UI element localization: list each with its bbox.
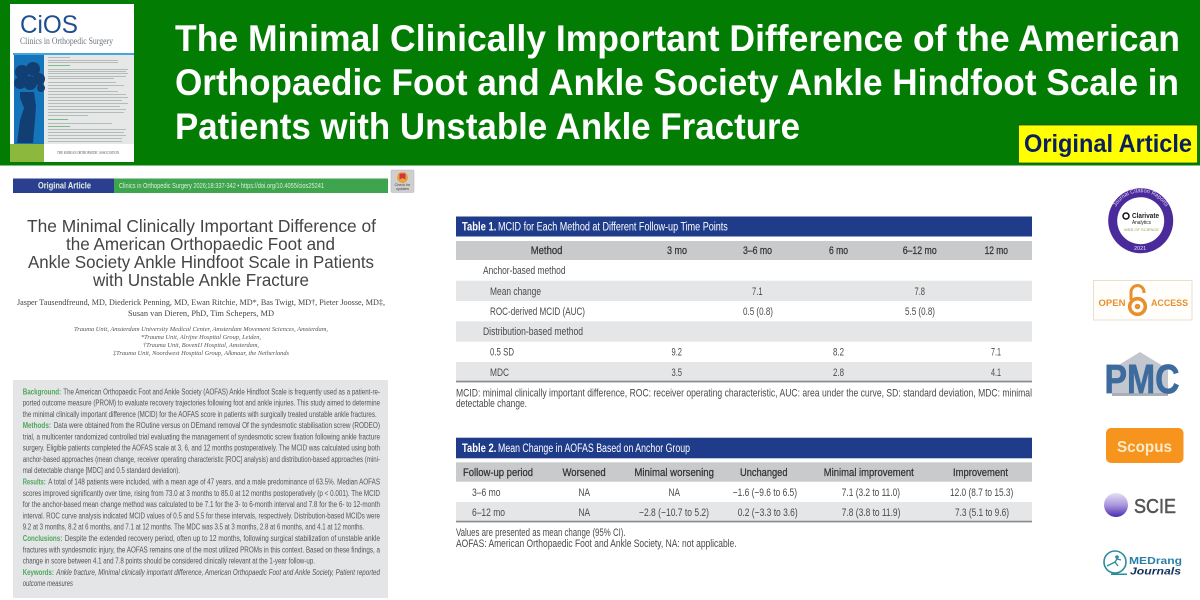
article header bar: Original Article (38, 180, 91, 190)
abstract: results: A total of 148 patients were included, with a mean age of 47 years, and a male predominance of 63.5%. Median AOFAS (48, 478, 380, 486)
abstract: methods: mal detectable change [MDC] and 0.5 standard deviation). (23, 466, 180, 475)
table 1 rows: 7.8 (914, 286, 925, 298)
logo: MEDrang Journals: Journals (1130, 566, 1181, 578)
affiliations: †Trauma Unit, BovenIJ Hospital, Amsterdam, (143, 342, 259, 349)
table 2 title bar: Mean Change in AOFAS Based on Anchor Group (498, 443, 690, 455)
table 1 rows: Anchor-based method (483, 265, 566, 277)
table 1 title bar (456, 216, 1032, 236)
logo: SCIE (1104, 493, 1176, 518)
table 1 rows: 7.1 (991, 346, 1001, 358)
logo: Clarivate Journal Citation Reports: 2021 (1134, 246, 1146, 252)
abstract: keywords: Ankle fracture, Minimal clinically important difference, American Orthopaedic Foot and Ankle Society, Patient reported (55, 568, 381, 577)
icon: check for updates: Check for (394, 183, 411, 187)
article title: The Minimal Clinically Important Difference of (27, 216, 376, 236)
abstract: methods: surgery. Eligible patients completed the AOFAS scale at 3, 6, and 12 months postoperatively. The MCID was calculated using both (23, 444, 380, 453)
abstract: results: scores improved significantly over time, rising from 73.0 at 3 months to 85.0 at 12 months postoperatively (p < 0.001). The MCID (23, 489, 380, 498)
header banner (0, 0, 1200, 166)
banner title (175, 18, 1180, 147)
logo: Open Access: OPEN (1098, 298, 1126, 309)
table 2 rows: 7.3 (5.1 to 9.6) (955, 507, 1009, 519)
table 1 rows: 9.2 (672, 346, 682, 358)
table 1 rows: Method (531, 245, 562, 257)
table 2 rows: Minimal worsening (634, 467, 714, 479)
journal cover (10, 4, 134, 162)
table 2 rows: 3–6 mo (472, 487, 500, 499)
abstract: background: Background: (23, 388, 61, 396)
icon: check for updates: updates (396, 187, 409, 191)
table 1 rows: Mean change (490, 286, 541, 298)
affiliations: *Trauma Unit, Alrijne Hospital Group, Leiden, (141, 334, 261, 341)
authors: Jasper Tausendfreund, MD, Diederick Penning, MD, Ewan Ritchie, MD*, Bas Twigt, MD†, Pieter Joosse, MD‡, (17, 297, 385, 307)
table 1 rows: 0.5 (0.8) (743, 306, 773, 318)
table 1 rows: 3.5 (672, 367, 682, 379)
abstract: keywords: outcome measures (23, 579, 73, 588)
abstract: conclusions: fractures with syndesmotic injury, the AOFAS remains one of the most utilized PROMs in this context. Based on these findings, a (23, 545, 381, 554)
abstract: background: the minimal clinically important difference (MCID) for the AOFAS score in patients with surgically treated unstable ankle fractures. (23, 410, 377, 419)
table 1 rows (456, 241, 1032, 382)
logo: SCIE: SCIE (1134, 495, 1176, 518)
logo: Open Access: ACCESS (1151, 298, 1188, 309)
logo: Clarivate Journal Citation Reports: Analytics (1132, 220, 1151, 226)
table 2 rows: Worsened (562, 467, 606, 479)
abstract: conclusions: Conclusions: (23, 534, 62, 543)
abstract: methods: Methods: (23, 421, 51, 430)
table 1 rows: 8.2 (833, 346, 844, 358)
journal cover: THE KOREAN ORTHOPAEDIC ASSOCIATION (57, 151, 119, 155)
abstract: background: ported outcome measure (PROM) to evaluate recovery trajectories following foot and ankle injuries. This study aimed to determine (23, 398, 380, 408)
abstract: results (23, 478, 380, 532)
table 1 footnote: detectable change. (456, 398, 527, 410)
table 2 (456, 438, 1032, 550)
table 2 rows: NA (578, 487, 591, 499)
table 1 rows: 2.8 (833, 367, 844, 379)
abstract: conclusions (23, 534, 381, 566)
abstract: conclusions: Despite the extended recovery period, often up to 12 months, following surgical stabilization of unstable ankle (65, 534, 380, 543)
logo: PMC: PMC (1104, 356, 1180, 402)
table 1 rows: 12 mo (985, 245, 1008, 257)
logo: Scopus (1106, 428, 1184, 463)
abstract: methods (23, 421, 380, 475)
table 2 rows: 0.2 (−3.3 to 3.6) (738, 507, 798, 519)
article title: Ankle Society Ankle Hindfoot Scale in Patients (28, 252, 374, 272)
icon: check for updates (391, 170, 414, 192)
abstract: background: The American Orthopaedic Foot and Ankle Society (AOFAS) Ankle Hindfoot Scale is frequently used as a patient-re- (63, 388, 380, 396)
table 1 title bar: Table 1. (462, 222, 496, 234)
logo: Clarivate Journal Citation Reports: Clarivate (1132, 211, 1159, 220)
article title (27, 216, 376, 290)
badge: Original Article: Original Article (1024, 130, 1192, 158)
table 1 rows: 0.5 SD (490, 346, 514, 358)
abstract: keywords: Keywords: (23, 568, 54, 577)
table 1 rows: ROC-derived MCID (AUC) (490, 306, 585, 318)
abstract: results: for the anchor-based mean change method was calculated to be 7.1 for the 3- to 6-month interval and 7.8 for the 6- to 12-month (23, 500, 380, 509)
table 1 rows: MDC (490, 367, 509, 379)
table 1 rows: 6 mo (829, 245, 848, 257)
affiliations: Trauma Unit, Amsterdam University Medical Center, Amsterdam Movement Sciences, Amsterdam, (74, 326, 328, 333)
table 1 title bar: MCID for Each Method at Different Follow-up Time Points (498, 222, 728, 234)
abstract: methods: trial, a multicenter randomized controlled trial evaluating the management of syndesmotic screw fixation following ankle fracture (23, 432, 380, 441)
logo: Open Access (1094, 280, 1192, 320)
abstract: keywords (23, 568, 381, 588)
abstract: results: Results: (23, 478, 46, 486)
table 1 rows: 5.5 (0.8) (905, 306, 935, 318)
table 2 rows: Unchanged (740, 467, 788, 479)
banner title: Patients with Unstable Ankle Fracture (175, 106, 800, 147)
table 2 rows: Follow-up period (463, 467, 533, 479)
table 1 rows: 7.1 (752, 286, 763, 298)
table 1 rows: 4.1 (991, 367, 1001, 379)
panel: abstract (13, 380, 388, 598)
table 2 rows: NA (578, 507, 591, 519)
abstract: results: interval. ROC curve analysis indicated MCID values of 0.5 and 5.5 for these intervals, respectively. Distribution-based MCIDs were (23, 511, 380, 520)
logo: Clarivate Journal Citation Reports (1108, 188, 1174, 254)
banner title: The Minimal Clinically Important Difference of the American (175, 18, 1180, 59)
table 1 rows: Distribution-based method (483, 326, 583, 338)
table 1 rows: 3–6 mo (743, 245, 772, 257)
table 2 title bar (456, 438, 1032, 458)
logo: Clarivate Journal Citation Reports: Journal Citation Reports (1113, 188, 1168, 206)
logo: MEDrang Journals: MEDrang (1129, 555, 1182, 567)
article header bar: Clinics in Orthopedic Surgery 2026;18:337-342 • https://doi.org/10.4055/cios25241 (119, 181, 324, 190)
table 2 title bar: Table 2. (462, 443, 496, 455)
article header bar (13, 178, 388, 193)
abstract: methods: Data were obtained from the ROutine versus on DEmand removal Of the syndesmotic stabilisation screw (RODEO) (54, 421, 380, 430)
affiliations: ‡Trauma Unit, Noordwest Hospital Group, Alkmaar, the Netherlands (113, 350, 290, 357)
table 2 footnote: Values are presented as mean change (95% CI). (456, 527, 626, 539)
table 2 rows: Improvement (953, 467, 1008, 479)
authors: Susan van Dieren, PhD, Tim Schepers, MD (128, 308, 274, 318)
authors (17, 297, 385, 318)
table 1 rows: 6–12 mo (903, 245, 937, 257)
table 2 rows: 7.8 (3.8 to 11.9) (842, 507, 900, 519)
article title: with Unstable Ankle Fracture (92, 270, 309, 290)
abstract: methods: anchor-based approaches (mean change, receiver operating characteristic [ROC] analysis) and distribution-based approaches (mini- (23, 455, 380, 464)
table 1 (456, 216, 1032, 410)
abstract: conclusions: change in score between 4.1 and 7.8 points should be considered clinically relevant at the 1-year follow-up. (23, 557, 315, 566)
table 1 footnote (456, 388, 1032, 410)
table 1 rows: 3 mo (667, 245, 687, 257)
logo: MEDrang Journals (1104, 551, 1182, 578)
table 2 rows: 12.0 (8.7 to 15.3) (950, 487, 1013, 499)
table 2 rows: −1.6 (−9.6 to 6.5) (733, 487, 797, 499)
abstract: results: 9.2 at 3 months, 8.2 at 6 months, and 7.1 at 12 months. The MDC was 3.5 at 3 months, 2.8 at 6 months, and 4.1 at 12 months. (23, 523, 364, 532)
table 2 rows: 6–12 mo (472, 507, 505, 519)
table 2 footnote (456, 527, 737, 550)
logo: Clarivate Journal Citation Reports: WEB OF SCIENCE (1124, 228, 1160, 232)
table 2 rows: Minimal improvement (824, 467, 914, 479)
table 2 rows: 7.1 (3.2 to 11.0) (842, 487, 900, 499)
table 2 footnote: AOFAS: American Orthopaedic Foot and Ankle Society, NA: not applicable. (456, 538, 737, 550)
table 1 footnote: MCID: minimal clinically important difference, ROC: receiver operating characteristic, AUC: area under the curve, SD: standard deviation, MDC: minimal (456, 388, 1032, 400)
abstract: background (23, 388, 380, 419)
article title: the American Orthopaedic Foot and (66, 234, 335, 254)
journal cover: CiOS (20, 11, 78, 39)
table 2 rows: NA (668, 487, 681, 499)
table 2 rows (456, 462, 1032, 522)
affiliations (74, 326, 328, 357)
table 2 rows: −2.8 (−10.7 to 5.2) (639, 507, 709, 519)
journal cover: Clinics in Orthopedic Surgery (20, 36, 113, 46)
logo: Scopus: Scopus (1117, 439, 1172, 456)
